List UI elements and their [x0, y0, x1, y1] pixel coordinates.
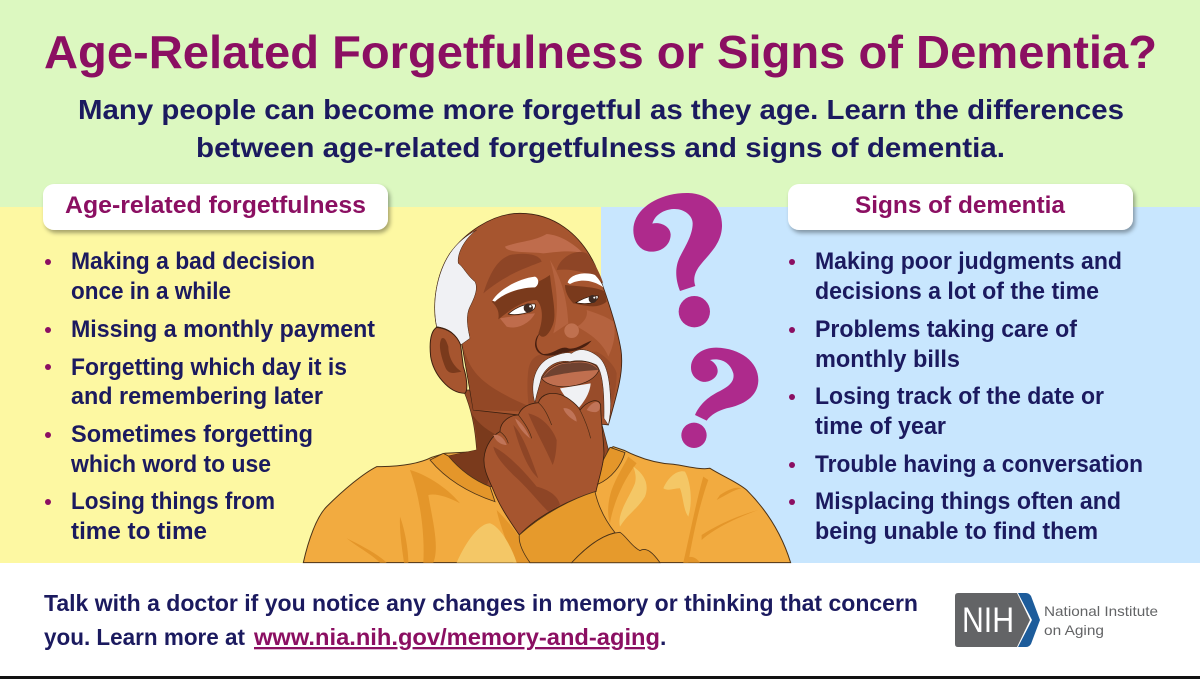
subtitle: between age-related forgetfulness and signs of dementia.: [196, 132, 1005, 163]
title: Age-Related Forgetfulness or Signs of Dementia?: [44, 26, 1157, 78]
footer message: [44, 590, 918, 650]
list: signs of dementia items: Making poor judgments and: [815, 248, 1122, 275]
list: signs of dementia items: Losing track of the date or: [815, 383, 1104, 410]
heading: signs of dementia: Signs of dementia: [855, 192, 1066, 219]
list: signs of dementia items: Trouble having a conversation: [815, 451, 1143, 478]
head and face: [435, 213, 622, 425]
hand on chin: [484, 393, 604, 535]
list: signs of dementia items: Problems taking care of: [815, 316, 1078, 343]
heading: age-related forgetfulness: Age-related forgetfulness: [65, 192, 366, 219]
panel: white footer background: [0, 563, 1200, 676]
neck and collar: [430, 390, 625, 502]
illustration: thinking man: [303, 213, 791, 563]
list: age-related forgetfulness items: and remembering later: [71, 383, 323, 410]
list: age-related forgetfulness items: Sometimes forgetting: [71, 421, 313, 448]
list: age-related forgetfulness items: which word to use: [70, 451, 271, 478]
footer message: Talk with a doctor if you notice any changes in memory or thinking that concern: [44, 590, 918, 616]
shirt: [303, 447, 791, 563]
list: age-related forgetfulness items: once in a while: [71, 278, 231, 305]
panel: yellow left background: [0, 207, 601, 563]
panel: green header background: [0, 0, 1200, 207]
icon: small question mark: [681, 348, 758, 448]
list: age-related forgetfulness items: time to time: [71, 518, 207, 545]
footer message: you. Learn more at: [44, 624, 245, 650]
subtitle: [78, 94, 1124, 163]
list: signs of dementia items: Misplacing things often and: [815, 488, 1121, 515]
list: signs of dementia items: being unable to find them: [815, 518, 1098, 545]
list: age-related forgetfulness items: Missing a monthly payment: [71, 316, 375, 343]
list: age-related forgetfulness items: Forgetting which day it is: [71, 354, 347, 381]
list: signs of dementia items: decisions a lot of the time: [815, 278, 1099, 305]
list: age-related forgetfulness items: [45, 248, 375, 545]
logo: NIH National Institute on Aging: [955, 593, 1158, 647]
list: signs of dementia items: time of year: [815, 413, 946, 440]
icon: large question mark: [633, 193, 722, 327]
bottom black edge: [0, 676, 1200, 679]
logo: NIH National Institute on Aging: National Institute: [1044, 603, 1158, 619]
sleeve cuff: [519, 492, 660, 563]
heading: signs of dementia: [788, 184, 1133, 230]
panel: blue right background: [601, 207, 1200, 563]
heading: age-related forgetfulness: [43, 184, 388, 230]
footer message: www.nia.nih.gov/memory-and-aging: [253, 624, 660, 650]
list: signs of dementia items: [789, 248, 1143, 545]
list: signs of dementia items: monthly bills: [815, 346, 960, 373]
ear: [430, 327, 467, 393]
subtitle: Many people can become more forgetful as they age. Learn the differences: [78, 94, 1124, 125]
list: age-related forgetfulness items: Losing things from: [71, 488, 275, 515]
list: age-related forgetfulness items: Making a bad decision: [71, 248, 315, 275]
footer message: .: [660, 624, 666, 650]
logo: NIH National Institute on Aging: on Aging: [1044, 622, 1104, 638]
logo: NIH National Institute on Aging: NIH: [962, 601, 1014, 640]
